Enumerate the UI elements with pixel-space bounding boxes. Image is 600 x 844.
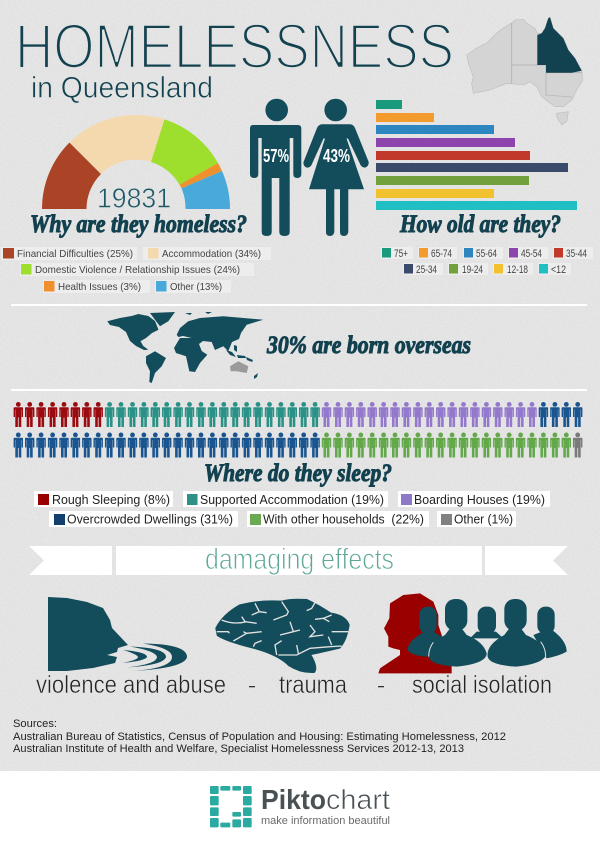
segment: other bbox=[182, 171, 230, 209]
logo wordmark bbox=[261, 784, 390, 827]
legend: reasons: Domestic Violence / Relationship Issues (24%) bbox=[35, 264, 240, 276]
icon: world map bbox=[107, 312, 263, 383]
segment: health issues bbox=[180, 163, 222, 188]
legend: sleeping places bbox=[34, 491, 550, 527]
subtitle: in Queensland bbox=[31, 72, 213, 104]
sources: Australian Institute of Health and Welfare, Specialist Homelessness Services 2012-13, 2013 bbox=[13, 743, 464, 755]
pictogram: row one bbox=[14, 402, 582, 427]
legend: ages: 25-34 bbox=[416, 264, 437, 276]
banner heading: damaging effects bbox=[205, 543, 394, 576]
Queensland bbox=[537, 17, 582, 73]
sources: Sources: bbox=[13, 718, 57, 730]
legend: sleeping places: Supported Accommodation (19%) bbox=[200, 493, 384, 507]
icon: speaking head bbox=[48, 597, 187, 671]
label 43%: 43% bbox=[323, 146, 350, 166]
icon: man 57% bbox=[250, 99, 301, 236]
legend: sleeping places: Overcrowded Dwellings (31%) bbox=[67, 512, 233, 526]
pictogram: row two bbox=[14, 432, 582, 458]
legend: reasons: Accommodation (34%) bbox=[162, 248, 261, 260]
tagline: make information beautiful bbox=[261, 815, 390, 827]
legend: ages: 65-74 bbox=[431, 248, 452, 260]
legend: sleeping places: With other households (22%) bbox=[263, 512, 424, 526]
legend: ages: 75+ bbox=[394, 248, 408, 260]
label 57%: 57% bbox=[263, 146, 289, 166]
Australia highlighted bbox=[230, 361, 248, 373]
legend: ages: 35-44 bbox=[566, 248, 587, 260]
legend: reasons: Other (13%) bbox=[170, 281, 222, 293]
icon: brain bbox=[217, 600, 348, 672]
bar chart: age groups bbox=[376, 100, 577, 210]
legend: reasons bbox=[1, 247, 271, 293]
caption: trauma: trauma bbox=[279, 671, 347, 699]
footer band bbox=[0, 771, 600, 844]
legend: ages: 45-54 bbox=[521, 248, 542, 260]
legend: reasons: Financial Difficulties (25%) bbox=[17, 248, 133, 260]
legend: ages: <12 bbox=[551, 264, 566, 276]
caption: social isolation: social isolation bbox=[412, 671, 552, 699]
legend: sleeping places: Other (1%) bbox=[454, 512, 513, 526]
group of people bbox=[407, 599, 567, 667]
logo wordmark: chart bbox=[326, 784, 390, 815]
ribbon banner bbox=[29, 543, 568, 576]
legend: ages: 12-18 bbox=[507, 264, 528, 276]
map: Australia with Queensland highlighted bbox=[467, 17, 583, 125]
legend: sleeping places: Boarding Houses (19%) bbox=[414, 493, 545, 507]
legend: ages: 19-24 bbox=[462, 264, 483, 276]
segment: accommodation bbox=[70, 115, 164, 174]
heading: why homeless: Why are they homeless? bbox=[30, 211, 247, 238]
segment: domestic violence bbox=[151, 119, 218, 185]
total number: 19831 bbox=[97, 182, 171, 214]
chart: semi-circle reasons bbox=[42, 115, 230, 209]
sources bbox=[13, 718, 506, 755]
red isolated figure bbox=[378, 593, 452, 673]
heading: where do they sleep: Where do they sleep? bbox=[204, 460, 392, 487]
heading: how old: How old are they? bbox=[399, 211, 561, 238]
caption: violence and abuse: violence and abuse bbox=[36, 671, 226, 699]
title: HOMELESSNESS bbox=[15, 12, 454, 82]
logo wordmark: Pikto bbox=[261, 784, 326, 815]
legend: ages: 55-64 bbox=[476, 248, 497, 260]
icon: woman 43% bbox=[303, 99, 369, 236]
icon: Piktochart logo bbox=[210, 786, 252, 827]
heading: born overseas: 30% are born overseas bbox=[266, 332, 471, 359]
separator dash bbox=[249, 686, 255, 687]
icon: social isolation bbox=[378, 593, 567, 673]
legend: reasons: Health Issues (3%) bbox=[58, 281, 141, 293]
sources: Australian Bureau of Statistics, Census of Population and Housing: Estimating Homelessness, 2012 bbox=[13, 731, 506, 743]
separator dash bbox=[378, 686, 384, 687]
legend: ages bbox=[381, 247, 593, 276]
segment: financial difficulties bbox=[42, 142, 101, 209]
legend: sleeping places: Rough Sleeping (8%) bbox=[52, 493, 170, 507]
